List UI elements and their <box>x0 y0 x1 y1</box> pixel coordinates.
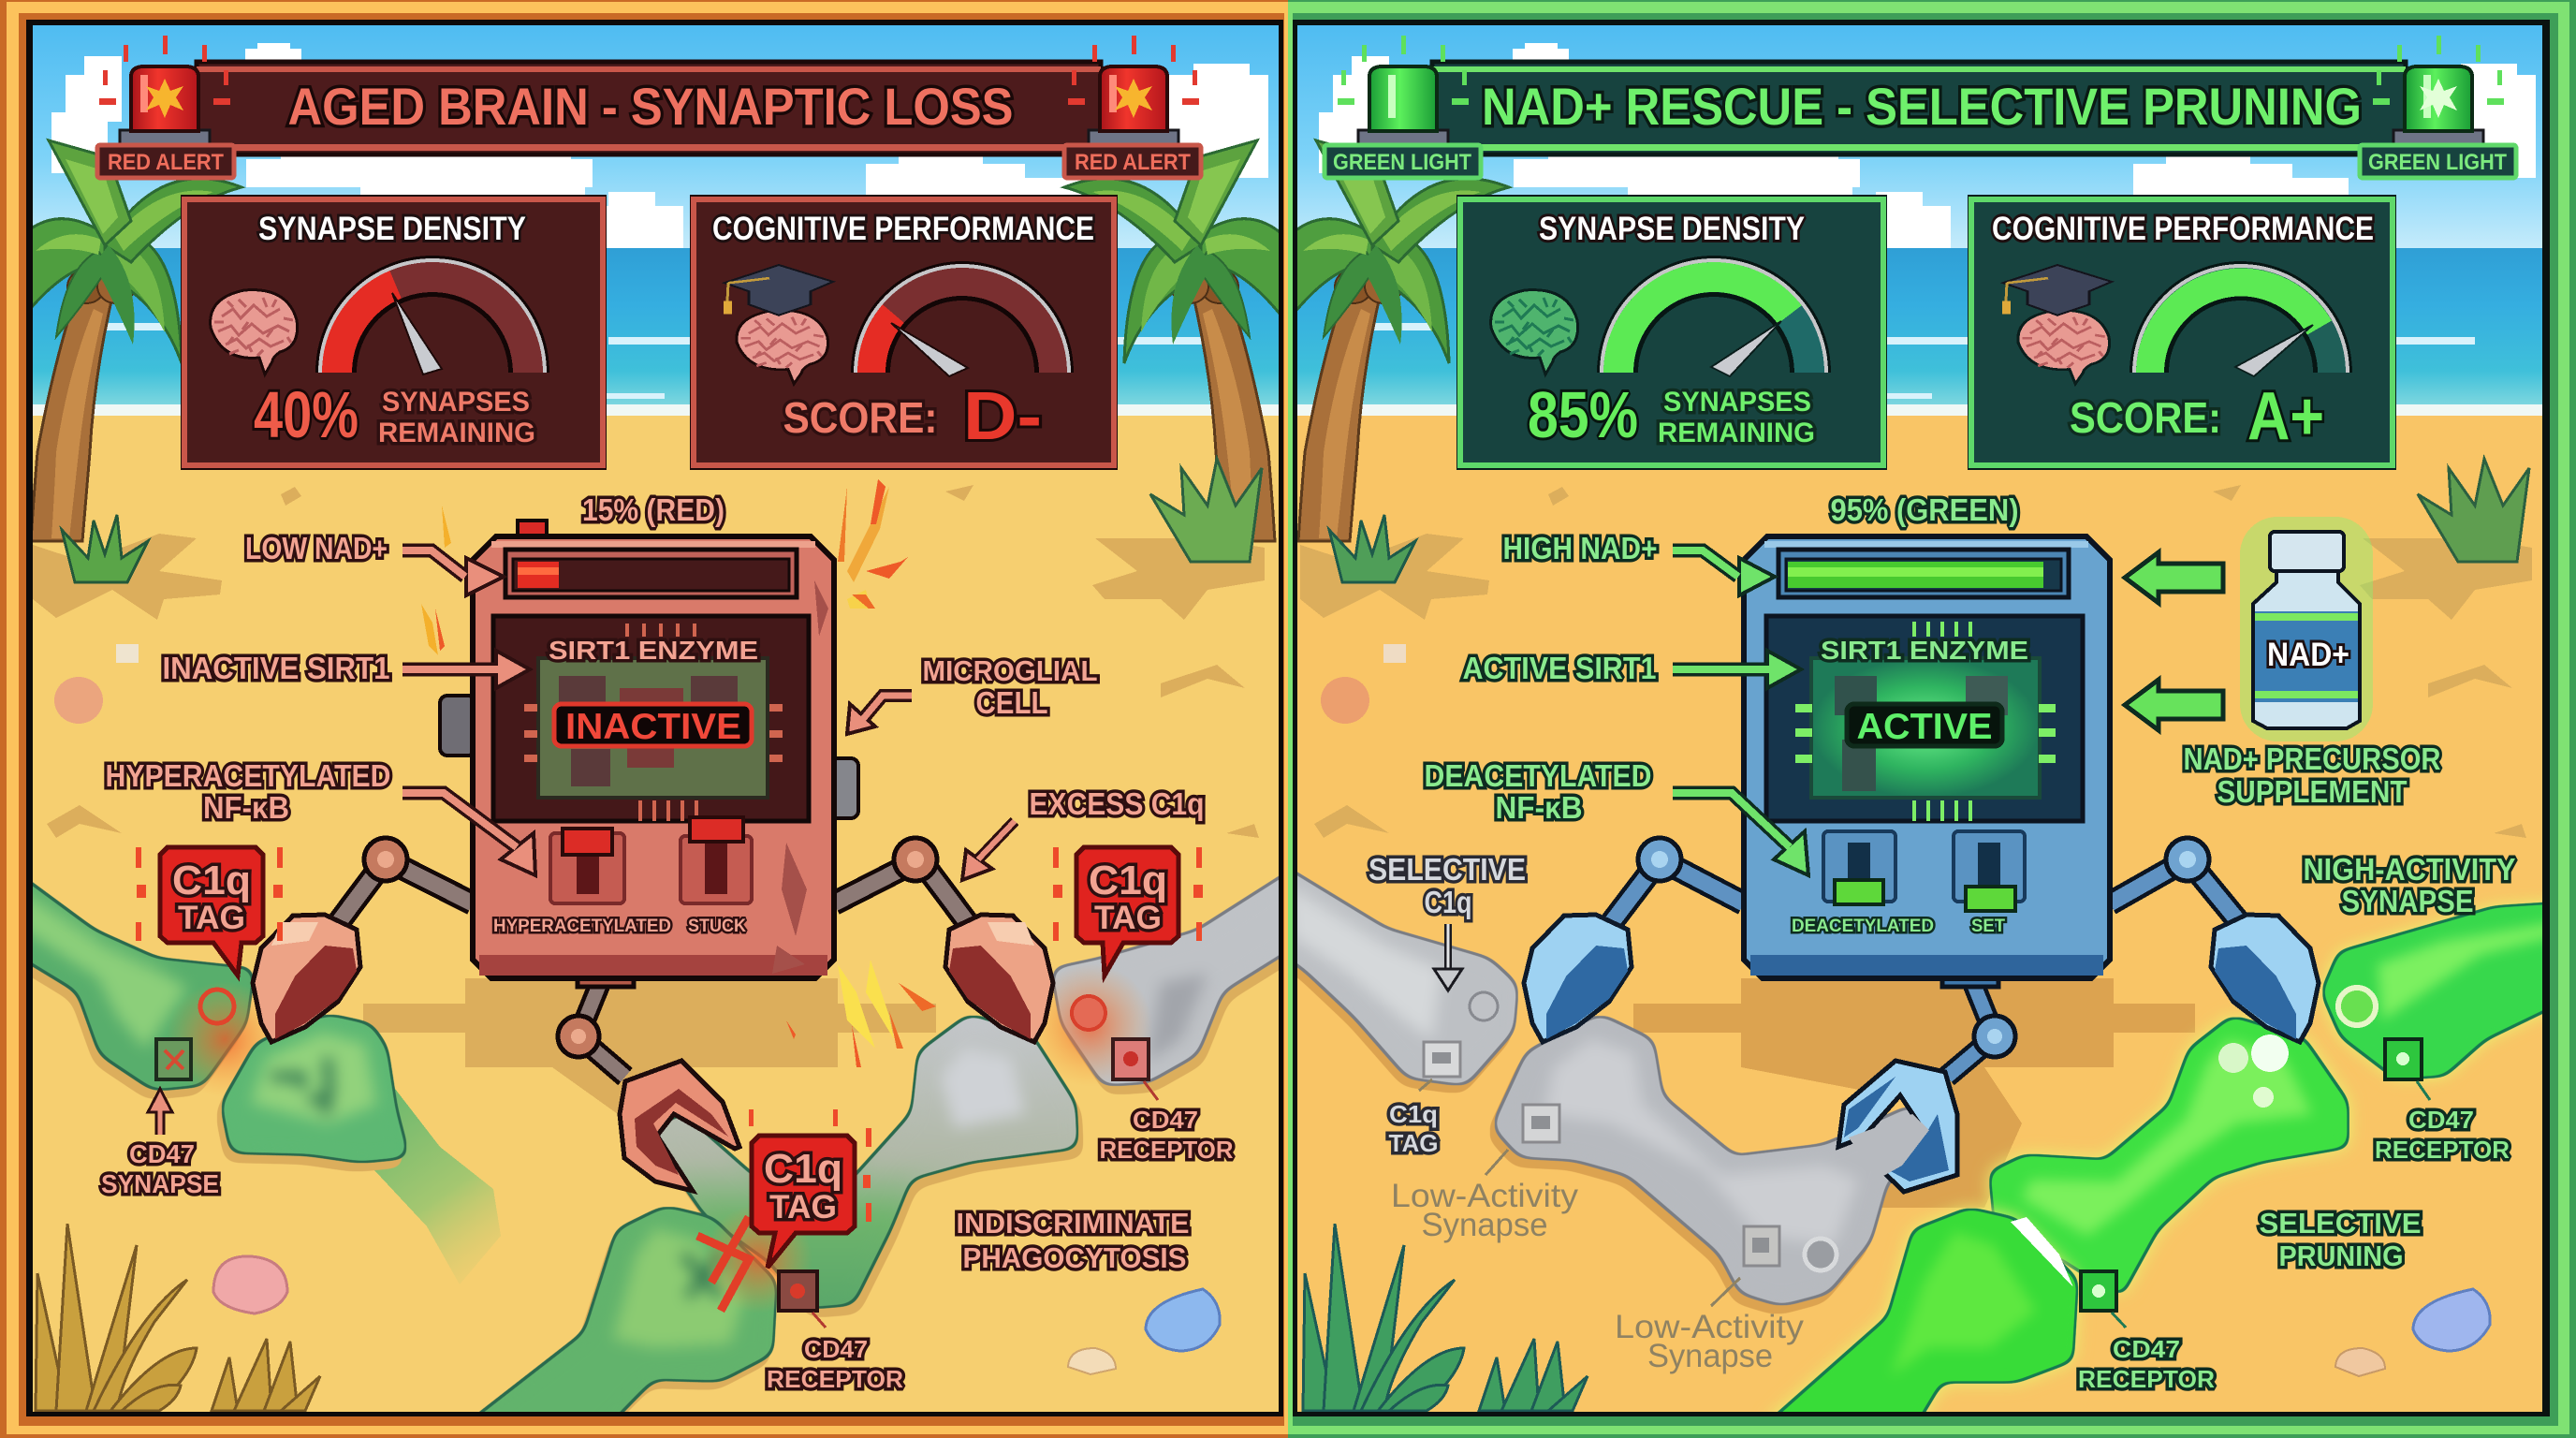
shell tan <box>54 677 103 724</box>
red glow right <box>1029 963 1152 1087</box>
arrow: selective C1q <box>1434 924 1462 990</box>
CD47 box left <box>156 1039 191 1079</box>
label: low-activity synapse: Low-Activity <box>1391 1178 1579 1214</box>
switch: deacetylated <box>1823 831 1895 904</box>
sand shadows <box>33 485 1265 838</box>
panel: synapse density <box>1456 195 1887 470</box>
body <box>473 536 834 978</box>
synapse: gray left <box>1273 861 1516 1084</box>
label: CD47 receptor right <box>2375 1106 2510 1164</box>
shell beige <box>2335 1348 2385 1376</box>
arrow: supplement lower <box>2125 680 2223 730</box>
panel heading: SYNAPSE DENSITY <box>258 211 526 247</box>
green beacon left <box>1338 36 1469 145</box>
pebble <box>116 644 139 663</box>
label: CD47 synapse <box>101 1139 219 1198</box>
red beacon right <box>1068 36 1199 145</box>
label: selective C1q <box>1368 852 1526 919</box>
label: high-activity synapse: NIGH-ACTIVITY <box>2303 852 2516 887</box>
synapse: green fading tail <box>318 1077 501 1284</box>
CD47 box right <box>2385 1039 2422 1079</box>
gray receptor mark <box>1470 992 1498 1020</box>
energy meter <box>505 550 797 597</box>
label: low-activity synapse: Synapse <box>1421 1207 1548 1243</box>
red alert badge left: RED ALERT <box>108 150 224 175</box>
C1q tag center <box>749 1109 871 1268</box>
switch: stuck <box>681 817 752 903</box>
C1q tag left: C1q <box>172 858 251 903</box>
palm tree left <box>1286 140 1509 541</box>
body lower trim <box>479 955 827 976</box>
dotted circle on stalk <box>1805 1239 1837 1270</box>
highlights on bulb <box>2218 1034 2289 1108</box>
orange glow center <box>704 1205 812 1313</box>
screen heading: SIRT1 ENZYME <box>1821 636 2028 665</box>
arrow: inactive SIRT1 <box>402 651 530 688</box>
icon: graduation cap <box>2002 265 2112 315</box>
switch label right: SET <box>1971 917 2005 936</box>
stat caption <box>1658 387 1815 448</box>
label: NAD+ precursor supplement: NAD+ PRECURSOR <box>2183 741 2441 776</box>
title: AGED BRAIN - SYNAPTIC LOSS <box>288 77 1013 136</box>
CD47 box center <box>779 1271 817 1311</box>
gauge: cognitive performance <box>869 279 1056 376</box>
leader: CD47 center <box>812 1313 826 1328</box>
stat value: 85% <box>1528 378 1638 451</box>
label: selective C1q: C1q <box>1425 885 1471 919</box>
sparks <box>421 479 936 1067</box>
screen <box>1766 616 2083 821</box>
pebble <box>1383 644 1406 663</box>
label: CD47 synapse: CD47 <box>129 1139 195 1168</box>
arrow: microglial cell <box>847 696 912 734</box>
label: microglial cell: MICROGLIAL <box>923 654 1097 687</box>
red alert badge right: RED ALERT <box>1075 150 1191 175</box>
side knob left <box>440 696 476 756</box>
energy meter <box>1778 550 2069 597</box>
background: sand <box>0 416 1310 1417</box>
stat caption <box>378 387 535 448</box>
shell tan <box>1321 677 1369 724</box>
score label: SCORE: <box>783 393 938 442</box>
icon: graduation cap <box>724 265 833 315</box>
grass upper left <box>62 515 148 582</box>
gauge: cognitive performance <box>2147 279 2334 376</box>
panel: cognitive performance <box>690 195 1118 470</box>
palm tree left <box>19 140 242 541</box>
arm: right <box>2110 838 2239 922</box>
label: deacetylated NF-kB: NF-κB <box>1496 790 1582 825</box>
sand shadows <box>1300 485 2532 838</box>
label: meter percent: 15% (RED) <box>582 492 724 527</box>
label: high-activity synapse: SYNAPSE <box>2342 884 2473 918</box>
switch: set <box>1954 831 2025 911</box>
grass upper right <box>2418 459 2529 562</box>
C1q tag right: TAG <box>1094 900 1162 936</box>
icon: brain <box>737 310 828 384</box>
arm: left <box>339 838 473 922</box>
claw: bottom <box>1838 1061 1957 1192</box>
label: indiscriminate phagocytosis: PHAGOCYTOSIS <box>962 1241 1187 1274</box>
brain folds <box>214 298 293 356</box>
gauge: synapse density <box>1616 274 1812 376</box>
leader: CD47 center <box>2112 1313 2126 1328</box>
leader: CD47 right <box>2417 1081 2430 1100</box>
damage marker right <box>1072 996 1105 1030</box>
panel heading: COGNITIVE PERFORMANCE <box>1992 211 2374 247</box>
label: high NAD+: HIGH NAD+ <box>1503 531 1657 565</box>
label: CD47 synapse: SYNAPSE <box>101 1169 219 1198</box>
claw: bottom <box>620 1061 739 1191</box>
body top highlight <box>1764 541 2088 548</box>
label: C1q tag gray: TAG <box>1389 1129 1438 1157</box>
label: low NAD+: LOW NAD+ <box>245 531 388 565</box>
label: indiscriminate phagocytosis <box>957 1207 1189 1274</box>
arrow: low NAD+ <box>402 550 504 595</box>
status pill: INACTIVE <box>565 707 741 747</box>
leader: gray C1q tag <box>1419 1079 1432 1091</box>
shell pink <box>213 1256 287 1313</box>
white contact highlight <box>2011 1217 2073 1287</box>
panel: NAD+ rescue scene <box>1267 25 2576 1432</box>
label: low-activity synapse lower <box>1615 1309 1805 1374</box>
shell beige <box>1068 1348 1116 1374</box>
label: CD47 receptor center: CD47 <box>2113 1335 2180 1363</box>
side knob right <box>829 758 858 818</box>
arrow: excess C1q <box>962 821 1015 880</box>
switch: hyperacetylated <box>550 829 624 903</box>
beacon core right <box>2420 79 2457 118</box>
red cross damage <box>697 1217 749 1311</box>
title: NAD+ RESCUE - SELECTIVE PRUNING <box>1482 77 2362 136</box>
leader: low activity lower <box>1711 1278 1740 1306</box>
panel: left frame <box>0 0 1288 1438</box>
body lower trim <box>1750 955 2103 976</box>
background: sky, clouds and sea <box>1267 25 2576 416</box>
C1q tag center: C1q <box>764 1146 842 1192</box>
arm: right <box>834 838 967 922</box>
dry grass large <box>36 1224 197 1411</box>
stat value: 40% <box>254 378 359 451</box>
label: low-activity synapse lower: Synapse <box>1647 1338 1773 1374</box>
claw: right <box>945 915 1053 1042</box>
green light badge right: GREEN LIGHT <box>2368 150 2507 175</box>
label: high-activity synapse <box>2303 852 2516 918</box>
switch label left: DEACETYLATED <box>1792 917 1934 936</box>
arrow: deacetylated <box>1673 793 1808 875</box>
score grade: A+ <box>2247 379 2324 454</box>
C1q tag right <box>1053 847 1203 976</box>
label: selective pruning <box>2260 1207 2421 1272</box>
screen heading: SIRT1 ENZYME <box>549 636 758 665</box>
status pill: ACTIVE <box>1857 707 1992 747</box>
C1q tag right: C1q <box>1089 858 1167 903</box>
dry grass small <box>212 1339 320 1411</box>
gray C1q box <box>1424 1042 1460 1077</box>
background: sky, clouds and sea <box>0 25 1310 416</box>
label: CD47 receptor center <box>2078 1335 2215 1393</box>
arrow: supplement upper <box>2125 552 2223 603</box>
switch label left: HYPERACETYLATED <box>493 917 671 936</box>
C1q tag left <box>136 847 283 976</box>
panel: aged brain scene <box>0 25 1310 1432</box>
arrow: CD47 synapse <box>148 1089 172 1135</box>
label: CD47 receptor right: CD47 <box>1133 1106 1198 1134</box>
label: CD47 receptor right: CD47 <box>2408 1106 2474 1134</box>
gauge: synapse density <box>334 274 531 374</box>
label: CD47 receptor center: RECEPTOR <box>2078 1365 2215 1393</box>
label: low-activity synapse <box>1391 1178 1579 1243</box>
score grade: D- <box>963 379 1042 454</box>
label: NAD+ precursor supplement <box>2183 741 2441 809</box>
device: microglial robot <box>440 521 858 978</box>
arm: bottom <box>1942 964 2015 1077</box>
claw: left <box>253 915 360 1042</box>
synapse: gray to green strand <box>651 1016 1076 1307</box>
rust marks <box>772 580 828 974</box>
label: C1q tag gray <box>1389 1100 1438 1157</box>
synapse: high activity bulb <box>1991 1018 2347 1295</box>
high activity ring <box>2338 988 2376 1025</box>
arrow: hyperacetylated <box>402 793 535 875</box>
label: selective pruning: SELECTIVE <box>2260 1207 2421 1240</box>
label: CD47 receptor right <box>1099 1106 1234 1164</box>
synapse: green lower bulb <box>459 1208 775 1432</box>
label: deacetylated NF-kB <box>1425 758 1651 825</box>
grass upper left <box>1329 515 1415 582</box>
device ground shadow <box>363 978 936 1161</box>
synapse: high activity right <box>2323 903 2569 1078</box>
label: selective C1q: SELECTIVE <box>1368 852 1526 887</box>
circuit chip <box>524 624 783 821</box>
circuit chip <box>1795 622 2056 821</box>
meter fill 95% <box>1788 562 2043 588</box>
label: meter percent: 95% (GREEN) <box>1831 492 2018 527</box>
claw: right <box>2211 915 2319 1042</box>
CD47 box right <box>1113 1039 1149 1079</box>
stat caption: REMAINING <box>378 418 535 448</box>
score label: SCORE: <box>2070 393 2221 442</box>
body <box>1744 536 2110 978</box>
label: CD47 receptor right: RECEPTOR <box>1099 1136 1234 1164</box>
label: NAD+ precursor supplement: SUPPLEMENT <box>2217 774 2408 809</box>
arrow: high NAD+ <box>1673 550 1775 595</box>
panel heading: SYNAPSE DENSITY <box>1539 211 1805 247</box>
switch label right: STUCK <box>688 917 746 936</box>
header banner <box>197 62 1101 154</box>
red beacon left <box>99 36 230 145</box>
damage marker left <box>200 990 234 1023</box>
label: CD47 receptor center: CD47 <box>804 1335 868 1363</box>
arm: bottom <box>558 964 634 1077</box>
header banner <box>1432 62 2406 154</box>
orange glow left <box>167 981 283 1097</box>
screen <box>493 616 809 821</box>
synapse: green bulb <box>223 1016 407 1161</box>
panel: cognitive performance <box>1968 195 2396 470</box>
stat caption: SYNAPSES <box>382 387 530 418</box>
grass upper right <box>1150 459 1262 562</box>
palm tree right <box>1064 140 1287 541</box>
synapse: high activity lower bulb <box>1760 1210 2076 1432</box>
shell blue <box>1146 1289 1220 1351</box>
icon: NAD+ bottle <box>2240 517 2373 741</box>
label: C1q tag gray: C1q <box>1389 1100 1438 1128</box>
device: microglial robot <box>1744 536 2110 978</box>
shell blue <box>2413 1289 2490 1351</box>
arrow: active SIRT1 <box>1673 651 1801 688</box>
green beacon right <box>2373 36 2504 145</box>
label: microglial cell: CELL <box>975 685 1048 720</box>
green grass small <box>1479 1339 1588 1411</box>
marker box on gray stalk <box>1744 1226 1779 1266</box>
synapse: gray low activity <box>1494 1016 1936 1304</box>
meter fill 15% <box>518 562 559 588</box>
label: inactive SIRT1: INACTIVE SIRT1 <box>163 651 389 685</box>
label: CD47 receptor right: RECEPTOR <box>2375 1136 2510 1164</box>
C1q tag center: TAG <box>769 1189 837 1225</box>
background: sand <box>1292 416 2546 1417</box>
green light badge left: GREEN LIGHT <box>1333 150 1471 175</box>
icon: brain <box>1491 290 1578 374</box>
label: low-activity synapse lower: Low-Activity <box>1615 1309 1805 1345</box>
label: hyperacetylated NF-kB: HYPERACETYLATED <box>105 758 391 793</box>
marker box on gray synapse <box>1523 1105 1559 1142</box>
leader: CD47 right <box>1144 1081 1158 1100</box>
synapse: green upper left <box>5 866 253 1089</box>
icon: brain <box>211 290 298 374</box>
CD47 box center <box>2081 1271 2116 1311</box>
label: active SIRT1: ACTIVE SIRT1 <box>1462 651 1657 685</box>
label: selective pruning: PRUNING <box>2278 1240 2404 1272</box>
C1q tag left: TAG <box>178 900 245 936</box>
synapse: gray right <box>1053 866 1301 1084</box>
label: microglial cell <box>923 654 1097 720</box>
label: deacetylated NF-kB: DEACETYLATED <box>1425 758 1651 793</box>
brain folds <box>741 317 824 368</box>
icon: brain <box>2018 310 2110 384</box>
panel: synapse density <box>181 195 607 470</box>
leader: low activity <box>1486 1150 1508 1175</box>
arm: left <box>1612 838 1744 922</box>
stat caption: REMAINING <box>1658 418 1815 448</box>
device ground shadow <box>1633 978 2195 1208</box>
stat caption: SYNAPSES <box>1663 387 1811 418</box>
label: CD47 receptor center: RECEPTOR <box>767 1365 903 1393</box>
body top highlight <box>491 541 815 548</box>
label: excess C1q: EXCESS C1q <box>1030 786 1204 821</box>
label: indiscriminate phagocytosis: INDISCRIMINATE <box>957 1207 1189 1240</box>
panel: right frame <box>1288 0 2576 1438</box>
label: CD47 receptor center <box>767 1335 903 1393</box>
green grass large <box>1303 1224 1464 1411</box>
label: hyperacetylated NF-kB <box>105 758 391 825</box>
label: hyperacetylated NF-kB: NF-κB <box>203 790 289 825</box>
panel heading: COGNITIVE PERFORMANCE <box>712 211 1094 247</box>
brain folds <box>2022 317 2105 368</box>
claw: left <box>1524 915 1632 1042</box>
bottle label: NAD+ <box>2267 637 2349 673</box>
top button <box>518 521 547 539</box>
brain folds <box>1495 298 1573 356</box>
